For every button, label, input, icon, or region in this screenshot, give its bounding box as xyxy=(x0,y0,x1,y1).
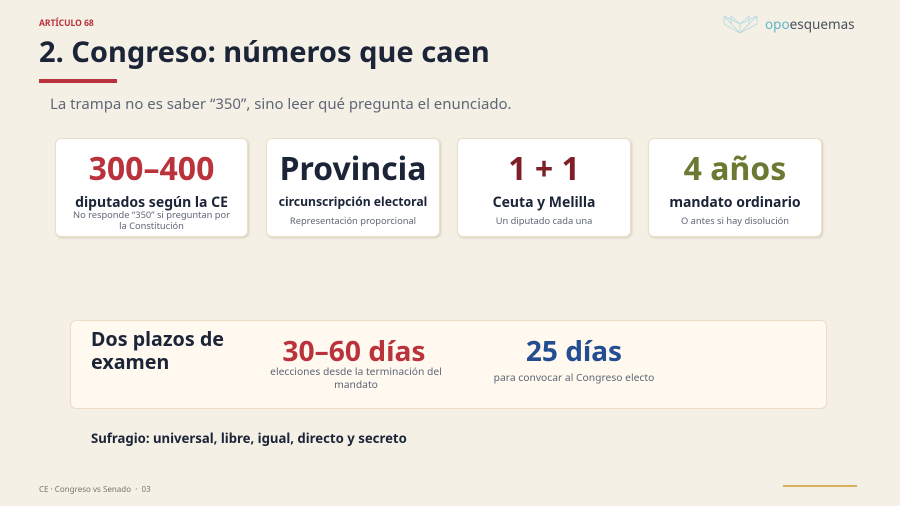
value: Provincia xyxy=(280,147,426,190)
caption: elecciones: mandato xyxy=(334,378,378,392)
label: diputados según la CE xyxy=(75,193,228,212)
value: 4 años xyxy=(684,147,786,190)
panel heading xyxy=(91,325,224,375)
label: circunscripción electoral xyxy=(279,193,427,210)
title: 2. Congreso: números que caen xyxy=(39,32,490,71)
logo: opoesquemas xyxy=(724,15,855,34)
value: 1 + 1 xyxy=(508,147,580,190)
section label: ARTÍCULO 68 xyxy=(39,18,94,29)
logo wordmark: opoesquemas xyxy=(765,15,855,33)
note: Representación proporcional xyxy=(290,214,416,227)
value: 25 días: 25 días xyxy=(526,332,622,370)
caption: convocar: para convocar al Congreso electo xyxy=(494,371,654,385)
icon: open book xyxy=(724,16,758,34)
panel heading: Dos plazos de xyxy=(91,325,224,352)
sufragio note: Sufragio: universal, libre, igual, directo y secreto xyxy=(91,429,407,447)
value: 30–60 días: 30–60 días xyxy=(282,332,426,370)
caption: elecciones xyxy=(270,365,442,392)
card: provincia xyxy=(266,138,440,236)
value: 300–400 xyxy=(89,147,214,190)
title underline xyxy=(39,79,117,83)
footer text: CE · Congreso vs Senado · 03 xyxy=(39,484,151,495)
label: Ceuta y Melilla xyxy=(493,193,595,212)
panel: dos plazos de examen xyxy=(70,320,827,409)
footer accent line xyxy=(783,485,857,487)
card: mandato xyxy=(648,138,822,236)
note xyxy=(73,208,230,232)
panel heading: examen xyxy=(91,348,169,375)
note: No responde “350” si preguntan por xyxy=(73,208,230,221)
note: Un diputado cada una xyxy=(496,214,592,227)
subtitle: La trampa no es saber “350”, sino leer qué pregunta el enunciado. xyxy=(50,94,512,114)
card: diputados xyxy=(55,138,248,236)
note: O antes si hay disolución xyxy=(681,214,789,227)
label: mandato ordinario xyxy=(669,193,801,212)
note: la Constitución xyxy=(119,219,184,232)
card: Ceuta y Melilla xyxy=(457,138,631,236)
caption: elecciones: elecciones desde la terminación del xyxy=(270,365,442,379)
